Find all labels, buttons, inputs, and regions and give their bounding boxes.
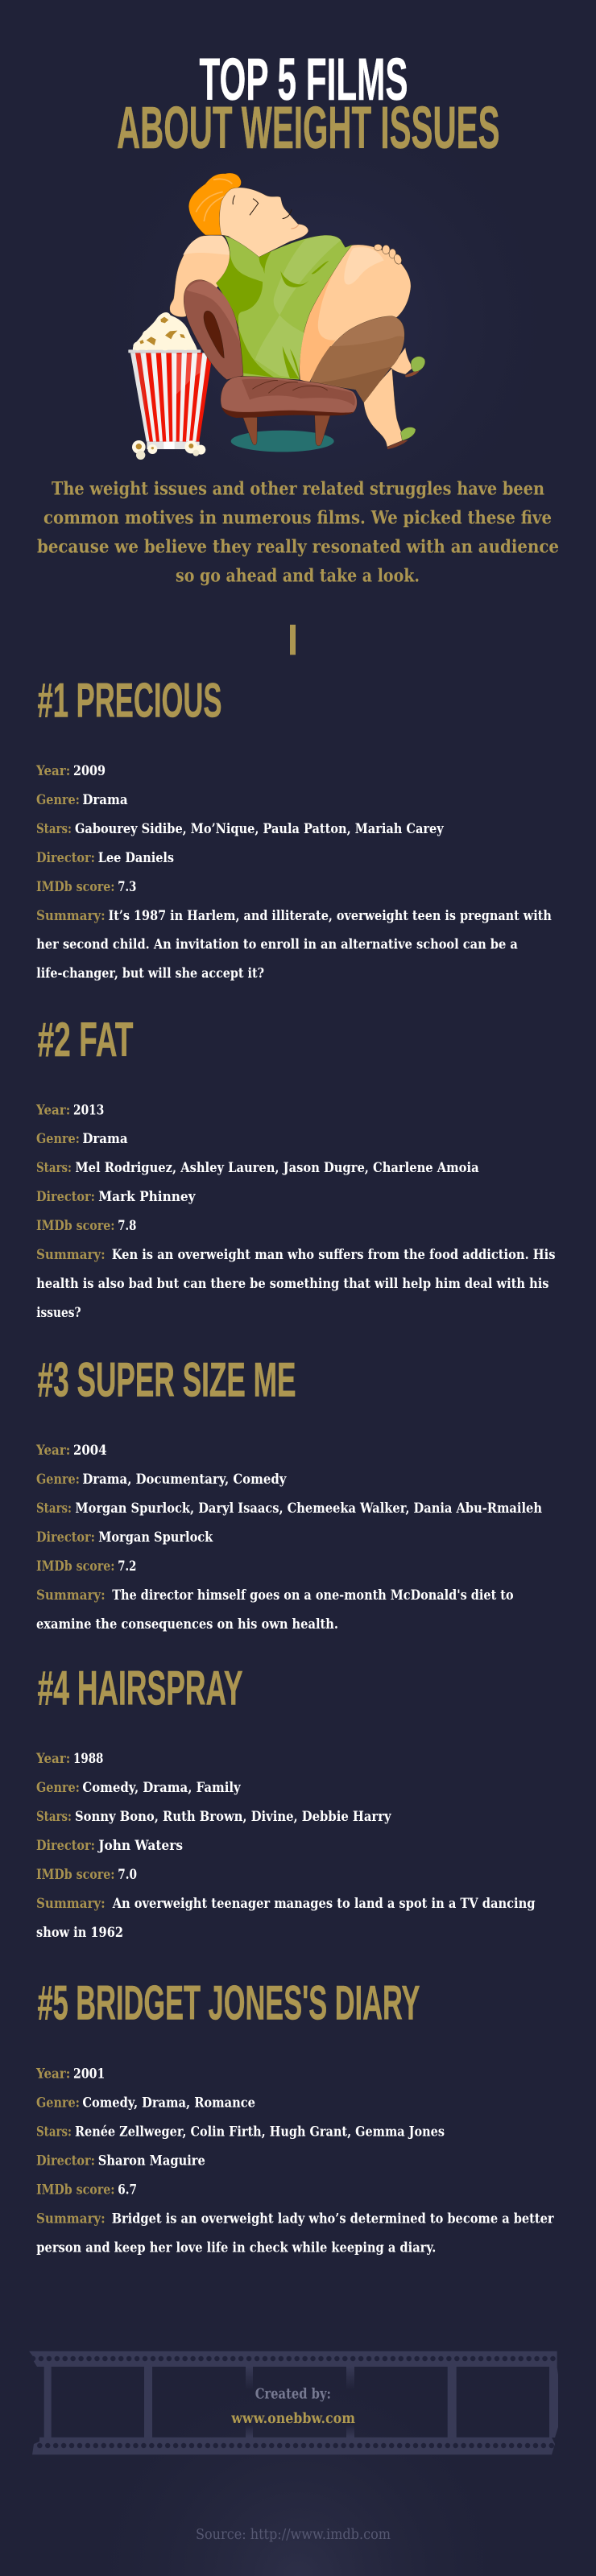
back leg and slipper (391, 348, 425, 377)
stars row: Renée Zellweger, Colin Firth, Hugh Grant, Gemma Jones (75, 2124, 445, 2140)
website link: www.onebbw.com (230, 2411, 355, 2427)
year row: 2009 (73, 763, 106, 779)
year row (35, 1443, 107, 1459)
face (219, 188, 308, 257)
summary (36, 1587, 514, 1633)
stars row: Stars: (36, 1501, 72, 1517)
year row: 2004 (73, 1443, 107, 1459)
chair back (184, 280, 243, 380)
director row (36, 1838, 183, 1854)
divider bar (290, 625, 296, 655)
stars row: Stars: (36, 1160, 72, 1176)
director row: Lee Daniels (98, 850, 174, 866)
director row: Director: (36, 2153, 95, 2169)
director row: John Waters (97, 1838, 183, 1854)
hair (188, 173, 241, 235)
genre row: Genre: (36, 1780, 80, 1796)
film strip (29, 2351, 558, 2454)
panel: film 3 Super Size Me (35, 1352, 542, 1633)
panel: film 4 Hairspray (35, 1660, 536, 1941)
director row: Director: (36, 850, 95, 866)
summary (36, 1247, 556, 1321)
floor shadow (231, 431, 334, 452)
summary: her second child. An invitation to enroll in an alternative school can be a (36, 937, 518, 953)
stars row: Gabourey Sidibe, Mo’Nique, Paula Patton, Mariah Carey (75, 821, 445, 837)
green tank top (216, 235, 352, 380)
summary: show in 1962 (36, 1925, 123, 1941)
imdb score row: IMDb score: (36, 1867, 114, 1883)
intro paragraph: so go ahead and take a look. (176, 565, 420, 586)
year row: Year: (35, 2066, 70, 2083)
chair seat (221, 377, 357, 417)
year row (35, 2066, 105, 2083)
stars row: Mel Rodriguez, Ashley Lauren, Jason Dugre, Charlene Amoia (75, 1160, 479, 1176)
director row (36, 2153, 205, 2169)
genre row: Comedy, Drama, Romance (82, 2095, 255, 2112)
illustration: overweight person reclining in armchair with popcorn (128, 173, 425, 460)
summary: person and keep her love life in check while keeping a diary. (36, 2240, 436, 2256)
imdb score row: IMDb score: (36, 1558, 114, 1575)
summary (36, 1896, 536, 1941)
summary: The director himself goes on a one-month McDonald's diet to (112, 1587, 514, 1604)
genre row: Genre: (36, 1131, 80, 1147)
stars row: Stars: (36, 1809, 72, 1825)
front leg and slipper (364, 368, 416, 449)
year row (35, 763, 106, 779)
year row (35, 1751, 103, 1767)
year row: Year: (35, 763, 70, 779)
heading: #1 Precious: #1 PRECIOUS (37, 673, 222, 728)
stars row: Sonny Bono, Ruth Brown, Divine, Debbie Harry (75, 1809, 392, 1825)
panel: film 5 Bridget Jones's Diary (35, 1975, 554, 2256)
belly (300, 245, 411, 382)
summary: life-changer, but will she accept it? (36, 966, 264, 982)
title (117, 46, 499, 161)
summary: Summary: (36, 908, 106, 924)
brown shorts (310, 316, 404, 402)
imdb score row: 7.2 (118, 1558, 136, 1575)
title: TOP 5 FILMS (200, 46, 408, 113)
imdb score row: 7.3 (118, 879, 136, 895)
genre row: Drama (82, 1131, 128, 1147)
summary: Summary: (36, 1247, 106, 1263)
summary: Summary: (36, 1587, 106, 1604)
director row: Director: (36, 1189, 95, 1205)
footer film strip with credits (29, 2351, 558, 2454)
year row: 2013 (73, 1102, 104, 1118)
genre row: Genre: (36, 1472, 80, 1488)
summary: An overweight teenager manages to land a spot in a TV dancing (112, 1896, 536, 1912)
genre row: Drama (82, 792, 128, 808)
summary: Summary: (36, 1896, 106, 1912)
director row: Mark Phinney (98, 1189, 197, 1205)
stars row: Stars: (36, 2124, 72, 2140)
source line: Source: http://www.imdb.com (196, 2527, 391, 2543)
year row: Year: (35, 1443, 70, 1459)
hand (374, 244, 403, 265)
popcorn kernels on floor (132, 440, 205, 460)
genre row: Comedy, Drama, Family (82, 1780, 242, 1796)
year row (35, 1102, 104, 1118)
director row (36, 850, 174, 866)
year row: Year: (35, 1102, 70, 1118)
armchair (184, 280, 357, 446)
genre row: Genre: (36, 792, 80, 808)
imdb score row: 7.8 (118, 1218, 136, 1234)
genre row: Genre: (36, 2095, 80, 2112)
stars row: Stars: (36, 821, 72, 837)
summary (36, 908, 552, 982)
director row: Sharon Maguire (98, 2153, 205, 2169)
summary: examine the consequences on his own health. (36, 1616, 338, 1633)
chair legs (243, 415, 330, 446)
heading: #2 Fat: #2 FAT (37, 1012, 134, 1067)
popcorn pile (133, 312, 197, 350)
arm (170, 235, 230, 317)
genre row (36, 792, 128, 808)
imdb score row: 7.0 (118, 1867, 137, 1883)
imdb score row: IMDb score: (36, 2182, 114, 2198)
director row: Director: (36, 1838, 95, 1854)
summary: Summary: (36, 2211, 106, 2227)
genre row (36, 1131, 128, 1147)
imdb score row: 6.7 (118, 2182, 137, 2198)
created by credit: Created by: (255, 2386, 331, 2402)
heading: #3 Super Size Me: #3 SUPER SIZE ME (37, 1352, 296, 1407)
year row: 1988 (73, 1751, 103, 1767)
imdb score row: IMDb score: (36, 879, 114, 895)
genre row: Drama, Documentary, Comedy (82, 1472, 287, 1488)
director row (36, 1530, 213, 1546)
summary (36, 2211, 554, 2256)
director row: Director: (36, 1530, 95, 1546)
year row: 2001 (73, 2066, 105, 2083)
director row: Morgan Spurlock (98, 1530, 213, 1546)
panel: film 1 Precious (35, 673, 552, 982)
popcorn bucket (128, 349, 213, 449)
director row (36, 1189, 197, 1205)
panel: film 2 Fat (35, 1012, 556, 1321)
year row: Year: (35, 1751, 70, 1767)
intro paragraph (37, 479, 559, 586)
imdb score row: IMDb score: (36, 1218, 114, 1234)
heading: #4 Hairspray: #4 HAIRSPRAY (37, 1660, 243, 1715)
summary: issues? (36, 1305, 81, 1321)
